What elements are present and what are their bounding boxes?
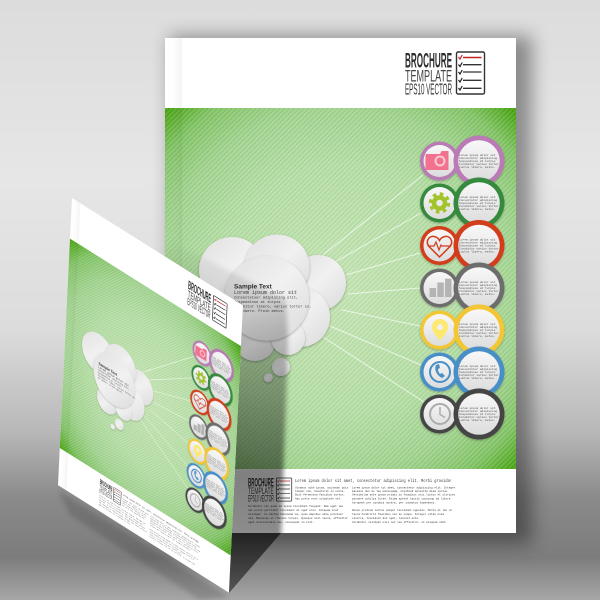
- item: gear: Luctus libero, metus.: [459, 207, 496, 211]
- item: heart: Curabitur varius tortor: [459, 246, 499, 250]
- item: camera: Curabitur varius tortor: [459, 162, 499, 166]
- item: gear: [420, 178, 504, 228]
- small item: gear: Consectetur adipiscing: [211, 382, 229, 395]
- small footer text columns: posuere cubilia Curae. Etiam aptent taciti sociosqu ad litora: [150, 522, 198, 554]
- floor shadow of small brochure: [58, 490, 229, 600]
- panel: small angled brochure: EPS10 VECTOR: [187, 296, 211, 321]
- item: pin: Lorem ipsum dolor sit: [459, 322, 496, 326]
- item: bars: [420, 262, 504, 314]
- item: pin: Suspendisse at turpis: [459, 328, 496, 332]
- small item: camera: Consectetur adipiscing: [212, 357, 230, 371]
- header: brochure template title: [405, 50, 452, 98]
- footer text columns: Vivamus nibh ipsum, accumsan quis: [295, 485, 349, 489]
- small checklist icon: [212, 295, 227, 328]
- small item: bars: Lorem ipsum dolor sit: [208, 429, 226, 442]
- small footer text columns: [99, 484, 200, 569]
- connector lines: [323, 175, 424, 402]
- item: clock: Suspendisse at turpis: [459, 412, 496, 416]
- item: camera: Lorem ipsum dolor sit: [459, 153, 496, 157]
- small item: pin: Lorem ipsum dolor sit: [207, 454, 225, 467]
- small footer text columns: viverra, tincidunt dui eget, laoreet ante.: [149, 533, 182, 556]
- item: phone: [420, 346, 504, 398]
- footer logo: TEMPLATE: [248, 486, 274, 496]
- small cloud text: Suspendisse at turpis: [98, 371, 121, 388]
- item: heart: Luctus libero, metus.: [459, 250, 496, 254]
- cloud text: Lorem ipsum dolor sit: [234, 290, 297, 296]
- small header title: TEMPLATE: [188, 289, 211, 314]
- footer text columns: torquent per conubia nostra, per inceptos himenaeos.: [352, 500, 436, 504]
- item: clock: Luctus libero, metus.: [459, 418, 496, 422]
- item: bars: Lorem ipsum dolor sit: [459, 280, 496, 284]
- item: bars: Consectetur adipiscing: [459, 283, 497, 287]
- small item: pin: Consectetur adipiscing: [207, 455, 225, 469]
- cloud text: at libero. Proin metus.: [234, 309, 285, 314]
- small item: heart: [190, 382, 232, 437]
- small item: bars: [188, 406, 231, 462]
- small footer logo: EPS10 VECTOR: [99, 488, 112, 502]
- footer text columns: tempor non, hendrerit in nulla.: [295, 489, 345, 493]
- small item: camera: Curabitur varius tortor: [212, 361, 231, 375]
- item: phone: Consectetur adipiscing: [459, 367, 497, 371]
- item: clock: Curabitur varius tortor: [459, 415, 499, 419]
- small footer logo: [99, 479, 121, 508]
- small item: pin: [187, 431, 230, 486]
- item: heart: Lorem ipsum dolor sit: [459, 238, 496, 242]
- small item: heart: Luctus libero, metus.: [209, 411, 227, 425]
- small item: pin: Curabitur varius tortor: [207, 459, 226, 473]
- cloud text: [234, 284, 311, 314]
- small footer text columns: hac porta eros vulputate vel.: [122, 504, 145, 521]
- small item: gear: Curabitur varius tortor: [210, 385, 230, 399]
- small item: bars: Luctus libero, metus.: [208, 436, 226, 449]
- footer text columns: volutpat. In dictum bibendum mi, quis dapibus odio pulvinar: [248, 512, 344, 516]
- item: gear: Suspendisse at turpis: [459, 201, 496, 205]
- small item: bars: Consectetur adipiscing: [208, 431, 227, 444]
- small cloud text: Sample Text: [98, 361, 118, 377]
- small item: gear: Lorem ipsum dolor sit: [211, 380, 228, 393]
- footer text columns: [248, 485, 456, 524]
- small item: phone: Curabitur varius tortor: [206, 483, 225, 497]
- item: pin: Curabitur varius tortor: [459, 331, 499, 335]
- small item: phone: [186, 455, 229, 510]
- small footer text columns: Lorem ipsum dolor sit amet, consectetur adipiscing elit. Integer: [150, 515, 200, 549]
- footer logo: BROCHURE: [248, 478, 274, 490]
- small footer text columns: nec purus porttitor tincidunt at eget eros. Aliquam erat: [99, 496, 143, 526]
- small header title: [187, 278, 212, 321]
- footer text columns: Duis fermentum faucibus tortor,: [295, 493, 345, 497]
- small footer text columns: maximus dui ac leo malesuada, eleifend molestie diam varius.: [150, 518, 197, 549]
- small page base: [58, 198, 243, 593]
- small item: camera: Luctus libero, metus.: [211, 362, 229, 376]
- small footer text columns: Curabitur nec quam id ipsum tincidunt feugiat. Nam eget leo: [99, 494, 145, 526]
- small item: phone: Lorem ipsum dolor sit: [206, 478, 224, 491]
- item: pin: [420, 304, 504, 356]
- small footer text columns: sed. Maecenas ut rhoncus turpis. Quisque nisl lacus, efficitur: [99, 501, 147, 534]
- small connector lines: [139, 326, 194, 488]
- item: pin: Luctus libero, metus.: [459, 334, 496, 338]
- small footer text columns: Vestibulum ante ipsum primis in faucibus orci luctus et ultrices: [150, 520, 200, 553]
- shadow cast on main brochure by small brochure: [166, 255, 290, 533]
- item: camera: [420, 136, 504, 186]
- dark wedge shadow under small brochure: [229, 533, 281, 593]
- small footer text columns: Vivamus nibh ipsum, accumsan quis: [123, 498, 148, 516]
- small item: clock: Curabitur varius tortor: [204, 507, 224, 522]
- small footer text columns: volutpat. In dictum bibendum mi, quis dapibus odio pulvinar: [99, 499, 145, 530]
- small item: pin: Suspendisse at turpis: [207, 457, 225, 470]
- item: gear: Consectetur adipiscing: [459, 198, 497, 202]
- small cloud text: Lorem ipsum dolor sit: [98, 365, 129, 388]
- small cloud: [79, 322, 155, 453]
- footer logo: EPS10 VECTOR: [248, 493, 274, 503]
- item: camera: Consectetur adipiscing: [459, 156, 497, 160]
- item: bars: Luctus libero, metus.: [459, 292, 496, 296]
- item: bars: Curabitur varius tortor: [459, 289, 499, 293]
- panel: small angled brochure: [58, 198, 243, 593]
- small item: heart: Consectetur adipiscing: [209, 406, 228, 420]
- shadow behind main brochure: [170, 36, 532, 544]
- item: heart: Suspendisse at turpis: [459, 244, 496, 248]
- small footer text columns: Duis fermentum faucibus tortor,: [122, 502, 147, 520]
- footer text columns: maximus dui ac leo malesuada, eleifend molestie diam varius.: [352, 489, 449, 493]
- cloud text: Suspendisse at turpis: [234, 300, 280, 305]
- small item: clock: Lorem ipsum dolor sit: [205, 502, 222, 515]
- header: brochure template title: TEMPLATE: [405, 68, 452, 86]
- icon: checklist: [456, 52, 484, 94]
- small item: phone: Luctus libero, metus.: [205, 485, 223, 498]
- footer text columns: Curabitur volutpat nisl nec leo efficitur, ut aliquam nibh: [352, 520, 446, 524]
- item: heart: [420, 220, 504, 271]
- small item: camera: [192, 333, 235, 388]
- small footer text columns: lacus hendrerit faucibus nec ac neque. Integer vitae enim: [150, 531, 194, 561]
- footer text columns: Donec pretium lectus semper tincidunt egestas. Morbi at leo ut: [352, 508, 452, 512]
- small item: camera: Suspendisse at turpis: [212, 359, 229, 372]
- small item: phone: Suspendisse at turpis: [206, 481, 223, 494]
- small footer text columns: Curabitur volutpat nisl nec leo efficitur, ut aliquam nibh: [149, 536, 195, 566]
- small item: clock: Suspendisse at turpis: [204, 506, 222, 519]
- cloud diagram: [199, 234, 346, 382]
- small item: clock: [185, 479, 227, 535]
- item: clock: Lorem ipsum dolor sit: [459, 406, 496, 410]
- small item: gear: Suspendisse at turpis: [210, 383, 228, 396]
- small item: gear: Luctus libero, metus.: [210, 387, 228, 400]
- footer heading: Lorem ipsum dolor sit amet, consectetur adipiscing elit. Morbi gravida!: [295, 479, 452, 484]
- footer text columns: Lorem ipsum dolor sit amet, consectetur adipiscing elit. Integer: [352, 485, 456, 489]
- small item: clock: Luctus libero, metus.: [204, 509, 222, 522]
- item: clock: [420, 388, 504, 440]
- small item: phone: Consectetur adipiscing: [206, 480, 224, 493]
- small footer text columns: tempor non, hendrerit in nulla.: [122, 500, 147, 517]
- item: bars: Suspendisse at turpis: [459, 286, 496, 290]
- small item: heart: Lorem ipsum dolor sit: [209, 404, 227, 418]
- footer text columns: eget sollicitudin nec, consequat in erat.: [248, 520, 314, 524]
- footer text columns: viverra, tincidunt dui eget, laoreet ante.: [352, 516, 420, 520]
- item: heart: Consectetur adipiscing: [459, 240, 497, 244]
- footer logo: [248, 478, 292, 503]
- small item: clock: Consectetur adipiscing: [205, 504, 223, 518]
- panel: main brochure: [165, 38, 516, 533]
- small item: heart: Suspendisse at turpis: [209, 408, 227, 421]
- small item: camera: Lorem ipsum dolor sit: [212, 355, 229, 369]
- item: camera: Luctus libero, metus.: [459, 165, 496, 169]
- item: phone: Lorem ipsum dolor sit: [459, 364, 496, 368]
- small cloud text: Curabitur libero, varius tortor in,: [98, 373, 136, 400]
- cloud text: Curabitur libero, varius tortor in,: [234, 304, 311, 310]
- item: phone: Curabitur varius tortor: [459, 373, 499, 377]
- panel: small angled brochure: BROCHURE: [188, 278, 211, 306]
- small cloud text: [98, 361, 136, 403]
- footer text columns: sed. Maecenas ut rhoncus turpis. Quisque nisl lacus, efficitur: [248, 516, 348, 520]
- footer text columns: Vestibulum ante ipsum primis in faucibus orci luctus et ultrices: [352, 493, 456, 497]
- footer text columns: posuere cubilia Curae. Etiam aptent taciti sociosqu ad litora: [352, 496, 451, 500]
- small item: gear: [191, 357, 233, 412]
- item: phone: Suspendisse at turpis: [459, 370, 496, 374]
- item: clock: Consectetur adipiscing: [459, 409, 497, 413]
- small footer text columns: torquent per conubia nostra, per inceptos himenaeos.: [150, 524, 191, 552]
- small item: bars: Curabitur varius tortor: [208, 434, 227, 448]
- small item: heart: Curabitur varius tortor: [209, 410, 229, 424]
- panel: main brochure: BROCHURE: [405, 50, 452, 72]
- item: gear: Curabitur varius tortor: [459, 204, 499, 208]
- small footer logo: TEMPLATE: [99, 484, 113, 498]
- footer text columns: hac porta eros vulputate vel.: [295, 496, 342, 500]
- small footer text columns: Donec pretium lectus semper tincidunt egestas. Morbi at leo ut: [150, 529, 198, 561]
- item: gear: Lorem ipsum dolor sit: [459, 195, 496, 199]
- small footer logo: BROCHURE: [100, 479, 113, 494]
- small item: pin: Luctus libero, metus.: [207, 460, 224, 474]
- small cloud text: Consectetuer adipiscing elit,: [98, 368, 129, 391]
- footer text columns: nec purus porttitor tincidunt at eget eros. Aliquam erat: [248, 508, 339, 512]
- cloud text: Sample Text: [234, 284, 273, 290]
- small cloud text: at libero. Proin metus.: [98, 376, 123, 395]
- footer text columns: Curabitur nec quam id ipsum tincidunt feugiat. Nam eget leo: [248, 504, 344, 508]
- item: phone: Luctus libero, metus.: [459, 376, 496, 380]
- footer text columns: lacus hendrerit faucibus nec ac neque. Integer vitae enim: [352, 512, 444, 516]
- small footer text columns: eget sollicitudin nec, consequat in erat.: [99, 504, 131, 526]
- small footer heading: Lorem ipsum dolor sit amet, consectetur adipiscing elit. Morbi gravida!: [123, 493, 199, 544]
- item: camera: Suspendisse at turpis: [459, 159, 496, 163]
- main page base with green field: [165, 38, 516, 533]
- panel: main brochure: EPS10 VECTOR: [405, 81, 452, 98]
- small item: bars: Suspendisse at turpis: [208, 433, 226, 446]
- cloud text: Consectetuer adipiscing elit,: [234, 296, 298, 300]
- item: pin: Consectetur adipiscing: [459, 325, 497, 329]
